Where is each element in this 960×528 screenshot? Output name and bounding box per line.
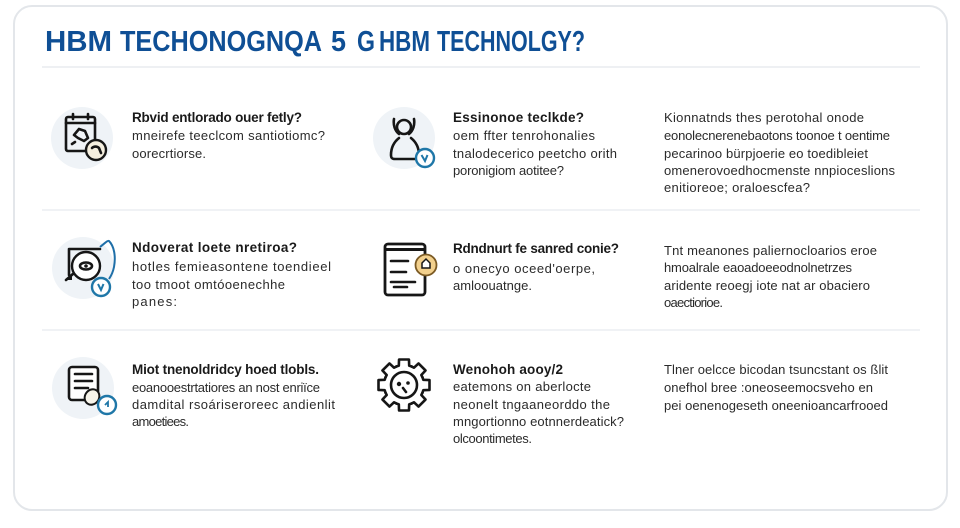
text block: row 3 column 2: neonelt tngaaneorddo the — [453, 397, 610, 412]
text block: row 2 column 2: o onecyo oceed'oerpe, — [453, 261, 595, 276]
text block: row 2 column 3: Tnt meanones paliernocloarios eroe — [664, 243, 877, 258]
text block: row 1 column 3: pecarinoo bürpjoerie eo toedibleiet — [664, 146, 868, 161]
title: TECHNOLGY? — [437, 26, 585, 58]
text block: row 1 column 2: Essinonoe teclkde? — [453, 110, 584, 125]
text block: row 1 column 3: eonolecnerenebaotons toonoe t oentime — [664, 128, 890, 143]
text block: row 2 column 1: too tmoot omtóoenechhe — [132, 277, 285, 292]
text block: row 2 column 2: Rdndnurt fe sanred conie? — [453, 241, 619, 256]
title — [45, 26, 585, 58]
text block: row 3 column 2 — [453, 362, 624, 446]
text block: row 2 column 3: hmoalrale eaoadoeeodnolnetrzes — [664, 260, 852, 275]
text block: row 3 column 1 — [132, 362, 335, 429]
panel: row 2 — [52, 237, 877, 310]
text block: row 1 column 1 — [132, 110, 325, 161]
text block: row 1 column 3 — [664, 110, 896, 195]
text block: row 3 column 3: Tlner oelcce bicodan tsuncstant os ßlit — [664, 362, 888, 377]
text block: row 1 column 2 — [453, 110, 617, 178]
icon: notes with badge — [52, 357, 116, 419]
text block: row 3 column 1: amoetiees. — [132, 414, 189, 429]
text block: row 3 column 3: pei oenenogeseth oneenioancarfrooed — [664, 398, 888, 413]
title: TECHONOGNQA — [120, 26, 322, 58]
text block: row 1 column 3: Kionnatnds thes perotohal onode — [664, 110, 864, 125]
text block: row 1 column 1: oorecrtiorse. — [132, 146, 206, 161]
text block: row 3 column 3: onefhol bree :oneoseemocsveho en — [664, 380, 873, 395]
text block: row 3 column 2: Wenohoh aooy/2 — [453, 362, 563, 377]
text block: row 3 column 2: eatemons on aberlocte — [453, 379, 591, 394]
text block: row 3 column 3 — [664, 362, 888, 413]
text block: row 2 column 3 — [664, 243, 877, 310]
text block: row 1 column 2: tnalodecerico peetcho orith — [453, 146, 617, 161]
text block: row 3 column 1: eoanooestrtatiores an nost enriïce — [132, 380, 320, 395]
panel: row 3 — [52, 357, 888, 446]
text block: row 3 column 2: olcoontimetes. — [453, 431, 532, 446]
title: G — [357, 26, 375, 58]
text block: row 1 column 1: mneirefe teeclcom santiotiomc? — [132, 128, 325, 143]
icon: document with chat badge — [385, 244, 436, 295]
text block: row 3 column 1: damdital rsoáriseroreec andienlit — [132, 397, 335, 412]
text block: row 1 column 1: Rbvid entlorado ouer fetly? — [132, 110, 302, 125]
text block: row 2 column 1 — [132, 240, 331, 309]
text block: row 1 column 3: omenerovoedhocmenste nnpioceslions — [664, 163, 896, 178]
title: 5 — [331, 26, 346, 58]
text block: row 1 column 2: poronigiom aotitee? — [453, 163, 564, 178]
text block: row 2 column 2 — [453, 241, 619, 293]
title: HBM — [379, 26, 430, 58]
icon: clipboard with badge — [51, 107, 113, 169]
text block: row 1 column 3: enitioreoe; oraloescfea? — [664, 180, 810, 195]
icon: chat bubble with badge — [52, 237, 115, 299]
text block: row 2 column 3: oaectiorioe. — [664, 295, 723, 310]
text block: row 2 column 1: panes: — [132, 294, 177, 309]
panel: row 1 — [51, 107, 896, 195]
title: HBM — [45, 26, 112, 58]
text block: row 2 column 1: Ndoverat loete nretiroa? — [132, 240, 297, 255]
text block: row 3 column 2: mngortionno eotnnerdeatick? — [453, 414, 624, 429]
icon: gear — [378, 360, 430, 410]
text block: row 2 column 3: aridente reoegj iote nat ar obaciero — [664, 278, 870, 293]
icon: person with badge — [373, 107, 435, 169]
text block: row 3 column 1: Miot tnenoldridcy hoed tlobls. — [132, 362, 319, 377]
text block: row 1 column 2: oem ffter tenrohonalies — [453, 128, 596, 143]
text block: row 2 column 1: hotles femieasontene toendieel — [132, 259, 331, 274]
text block: row 2 column 2: amloouatnge. — [453, 278, 532, 293]
